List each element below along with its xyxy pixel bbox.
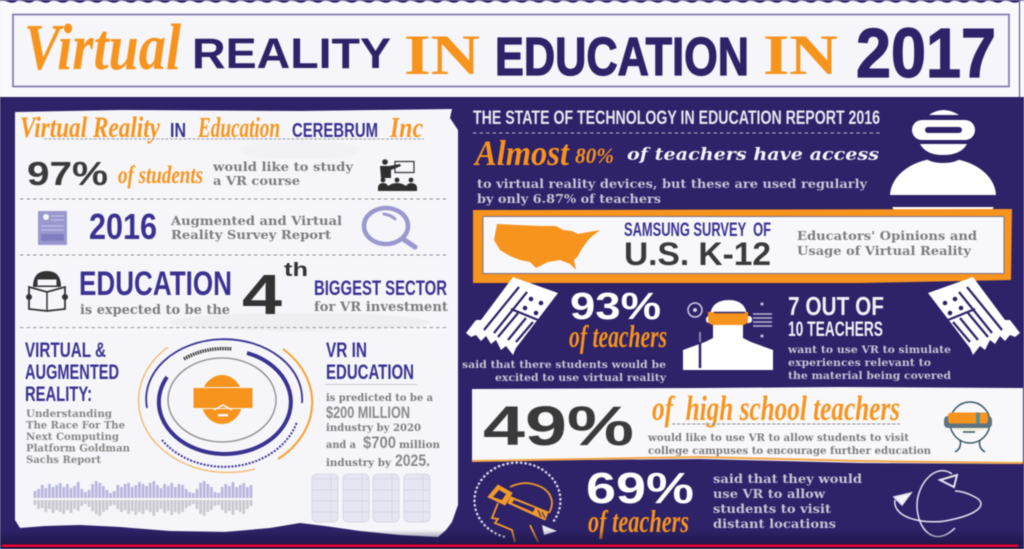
stat: 2016 survey report: 2016	[89, 206, 157, 247]
stat: 69% of teachers: of teachers	[588, 503, 689, 539]
stat: 69% of teachers: use VR to allow	[713, 487, 826, 501]
stat: almost 80%: Almost	[473, 133, 570, 173]
stat: 2016 survey report	[89, 206, 342, 247]
title: IN	[404, 24, 480, 87]
stat: education 4th biggest sector: BIGGEST SECTOR	[314, 277, 447, 300]
stat: 93% of teachers	[462, 286, 667, 384]
left heading: Education	[197, 113, 280, 144]
stat: 69% of teachers	[586, 464, 863, 539]
text block: virtual and augmented reality: REALITY:	[25, 383, 92, 406]
text block: VR in education: industry by 2020	[326, 422, 421, 434]
icon: head with goggles	[944, 402, 992, 452]
bottom shading	[0, 530, 1024, 545]
icon: teacher and class	[378, 159, 417, 191]
stat: education 4th biggest sector	[79, 260, 448, 327]
survey title	[624, 220, 771, 272]
title: 2017	[856, 14, 996, 92]
text block: VR in education	[325, 339, 440, 470]
icon: survey document	[38, 211, 67, 245]
stat: education 4th biggest sector: EDUCATION	[79, 265, 232, 303]
description: college campuses to encourage further education	[648, 446, 932, 457]
title	[24, 11, 996, 92]
stat: education 4th biggest sector: th	[284, 260, 308, 281]
icon: USA map	[494, 224, 600, 270]
icon: man with VR headset	[683, 300, 773, 370]
survey description: Educators' Opinions and	[797, 229, 978, 243]
icon: flag left	[466, 277, 558, 355]
stat: 69% of teachers: students to visit	[713, 502, 831, 516]
text block: virtual and augmented reality: Next Computing	[26, 432, 119, 443]
text block: VR in education: industry by	[326, 457, 392, 469]
chart: server cylinders	[312, 474, 430, 522]
text block: VR in education: $200 MILLION	[326, 403, 410, 422]
title: Virtual	[24, 11, 182, 84]
icon: orange VR headset	[193, 375, 253, 424]
left heading	[20, 111, 424, 144]
survey description	[797, 229, 978, 258]
text block: VR in education: VR IN	[326, 339, 367, 362]
panel: technology report: to virtual reality devices, but these are used regularly	[477, 177, 868, 191]
video progress bar	[2, 544, 1018, 547]
stat: education 4th biggest sector: is expected to be the	[80, 303, 230, 318]
icon: person reading book	[26, 271, 68, 311]
text block: VR in education: EDUCATION	[326, 361, 414, 384]
panel: technology report: 80%	[575, 143, 614, 168]
stat: 69% of teachers: distant locations	[713, 517, 836, 531]
stat: 93% of teachers: of teachers	[569, 318, 667, 354]
text block: virtual and augmented reality: The Race For The	[26, 420, 125, 432]
stat: 97% of students: would like to study	[212, 160, 354, 174]
stat: 97% of students: of students	[118, 162, 203, 189]
title: REALITY	[192, 30, 391, 78]
stat: 69% of teachers: said that they would	[713, 472, 863, 486]
text block: virtual and augmented reality: Understanding	[26, 409, 112, 420]
left heading: IN	[170, 120, 186, 142]
big number: 49%	[483, 394, 634, 457]
chart: concentric VR dial	[139, 339, 312, 473]
stat: 2016 survey report: Augmented and Virtual	[170, 214, 342, 228]
left heading: CEREBRUM	[292, 120, 378, 142]
left heading: Virtual Reality	[20, 111, 161, 144]
text block: virtual and augmented reality: VIRTUAL &	[25, 339, 106, 362]
text block: virtual and augmented reality: Platform Goldman	[26, 444, 131, 454]
panel: technology report: by only 6.87% of teachers	[477, 192, 661, 206]
text block: VR in education: and a	[326, 439, 356, 451]
chart: audio waveform	[35, 481, 251, 516]
stat: 7 out of 10 teachers	[787, 291, 952, 382]
header band	[0, 0, 1024, 104]
stat: education 4th biggest sector: 4	[242, 263, 282, 327]
stat: 97% of students	[27, 155, 354, 192]
heading: THE STATE OF TECHNOLOGY IN EDUCATION REPORT 2016	[473, 108, 880, 129]
panel: technology report: of teachers have access	[627, 145, 879, 165]
title: EDUCATION	[495, 27, 749, 87]
panel: Samsung survey	[473, 209, 1012, 283]
stat: 93% of teachers: said that there students would be	[462, 359, 666, 371]
survey description: Usage of Virtual Reality	[797, 244, 972, 258]
icon: flag right	[928, 277, 1020, 355]
description: would like to use VR to allow students to visit	[647, 433, 909, 444]
text block: VR in education: million	[399, 439, 440, 451]
text block: virtual and augmented reality: AUGMENTED	[25, 361, 119, 384]
panel: left white torn paper	[15, 109, 458, 537]
stat: 7 out of 10 teachers: 7 OUT OF	[788, 291, 884, 321]
panel: 49% of high school teachers	[472, 387, 1023, 464]
stat: education 4th biggest sector: for VR investment	[314, 300, 448, 315]
description	[647, 433, 932, 457]
icon: orbit rotation arrows	[894, 471, 981, 537]
survey title: SAMSUNG SURVEY OF	[624, 220, 771, 241]
left heading: Inc	[389, 113, 423, 144]
survey title: U.S. K-12	[624, 236, 771, 272]
stat: 97% of students: 97%	[27, 155, 108, 192]
stat: 7 out of 10 teachers: the material being covered	[788, 370, 952, 382]
text block: VR in education: is predicted to be a	[326, 392, 433, 404]
script heading: of high school teachers	[652, 389, 900, 428]
stat: 7 out of 10 teachers: 10 TEACHERS	[788, 318, 883, 341]
stat: 97% of students: a VR course	[213, 174, 300, 188]
text block: VR in education: $700	[363, 433, 396, 452]
text block: VR in education: 2025.	[395, 451, 430, 470]
stat: 69% of teachers: 69%	[586, 464, 694, 513]
stat: 93% of teachers: excited to use virtual reality	[495, 372, 667, 384]
title: IN	[763, 24, 838, 87]
stat: 2016 survey report: Reality Survey Report	[171, 228, 331, 242]
panel: technology report	[473, 108, 882, 206]
text block: virtual and augmented reality: Sachs Report	[26, 455, 101, 466]
text block: virtual and augmented reality	[25, 339, 131, 466]
stat: 7 out of 10 teachers: want to use VR to simulate	[787, 344, 951, 356]
icon: head in VR with dashed orbit	[474, 463, 560, 542]
stat: 93% of teachers: 93%	[570, 286, 661, 328]
icon: magnifier	[364, 208, 415, 247]
stat: 7 out of 10 teachers: experiences relevant to	[788, 357, 931, 369]
icon: person with VR goggles	[880, 110, 1006, 234]
